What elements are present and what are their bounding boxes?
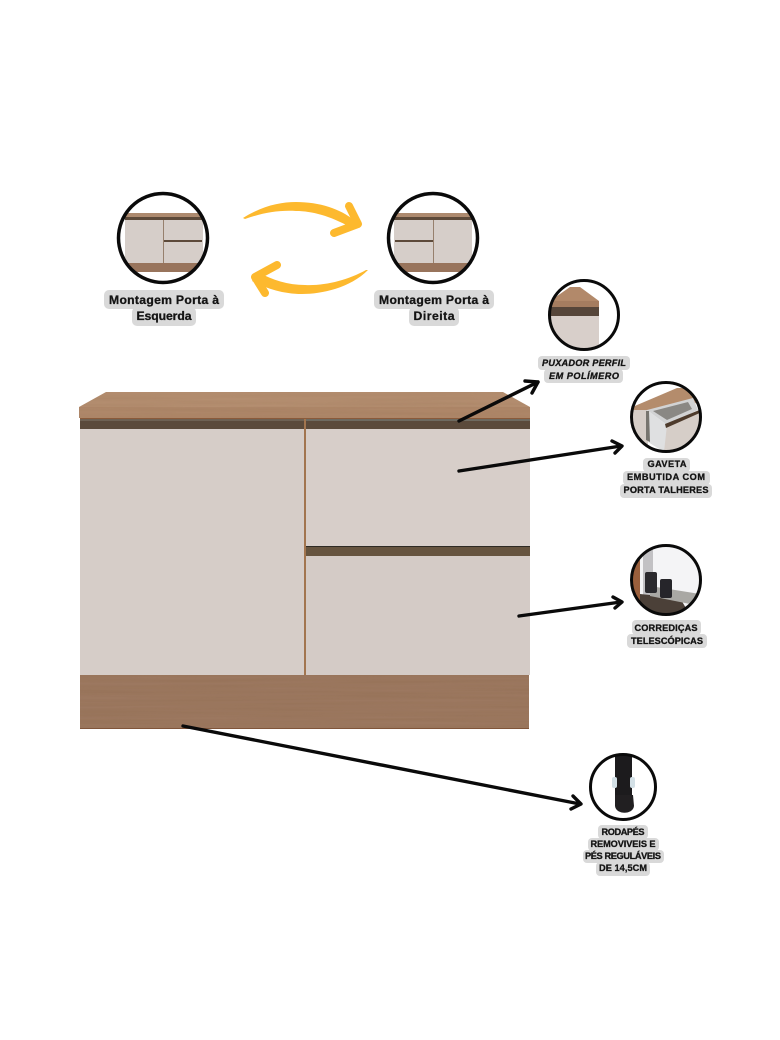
label: left door: Montagem Porta à — [109, 293, 219, 307]
icon: left door thumbnail — [118, 194, 208, 282]
label: handle: EM POLÍMERO — [549, 371, 619, 381]
label: drawer: GAVETA — [648, 459, 687, 469]
callout: left door assembly — [104, 194, 224, 326]
callout: feet — [583, 752, 664, 876]
arrow: yellow bottom — [252, 265, 368, 294]
label: feet: PÉS REGULÁVEIS — [585, 850, 661, 861]
callout: drawer — [620, 382, 712, 498]
label: slides: TELESCÓPICAS — [631, 635, 703, 646]
label: drawer — [620, 458, 712, 498]
label: slides — [627, 620, 707, 648]
arrow: to slides — [519, 597, 622, 616]
label: right door: Montagem Porta à — [379, 293, 489, 307]
arrow: to plinth and feet — [183, 726, 581, 809]
label: feet: REMOVIVEIS E — [590, 839, 656, 849]
callout: right door assembly — [374, 194, 494, 326]
callout: slides — [627, 545, 707, 648]
label: left door — [104, 290, 224, 326]
drawer: bottom — [306, 546, 530, 675]
cabinet — [79, 392, 530, 729]
label: right door — [374, 290, 494, 326]
door: left — [80, 419, 304, 675]
countertop — [79, 392, 530, 419]
icon: handle thumbnail — [548, 280, 618, 352]
icon: drawer thumbnail — [630, 382, 702, 454]
label: handle: PUXADOR PERFIL — [542, 358, 626, 368]
icon: right door thumbnail — [388, 194, 478, 282]
plinth — [80, 675, 529, 729]
icon: slides thumbnail — [632, 545, 702, 615]
label: slides: CORREDIÇAS — [634, 623, 698, 633]
arrow: to drawer — [459, 441, 622, 471]
gap between door and drawers — [304, 419, 306, 676]
label: feet: RODAPÉS — [602, 826, 644, 837]
label: feet — [583, 825, 664, 876]
label: left door: Esquerda — [136, 309, 192, 323]
label: right door: Direita — [414, 309, 455, 323]
label: handle — [538, 356, 630, 383]
label: drawer: EMBUTIDA COM — [627, 472, 705, 482]
drawer: top — [306, 419, 530, 546]
label: feet: DE 14,5CM — [599, 863, 647, 873]
arrow: to handle — [459, 381, 538, 421]
arrow: yellow top — [243, 202, 358, 233]
icon: foot thumbnail — [590, 752, 656, 820]
callout: handle — [538, 280, 630, 383]
label: drawer: PORTA TALHERES — [624, 485, 708, 495]
